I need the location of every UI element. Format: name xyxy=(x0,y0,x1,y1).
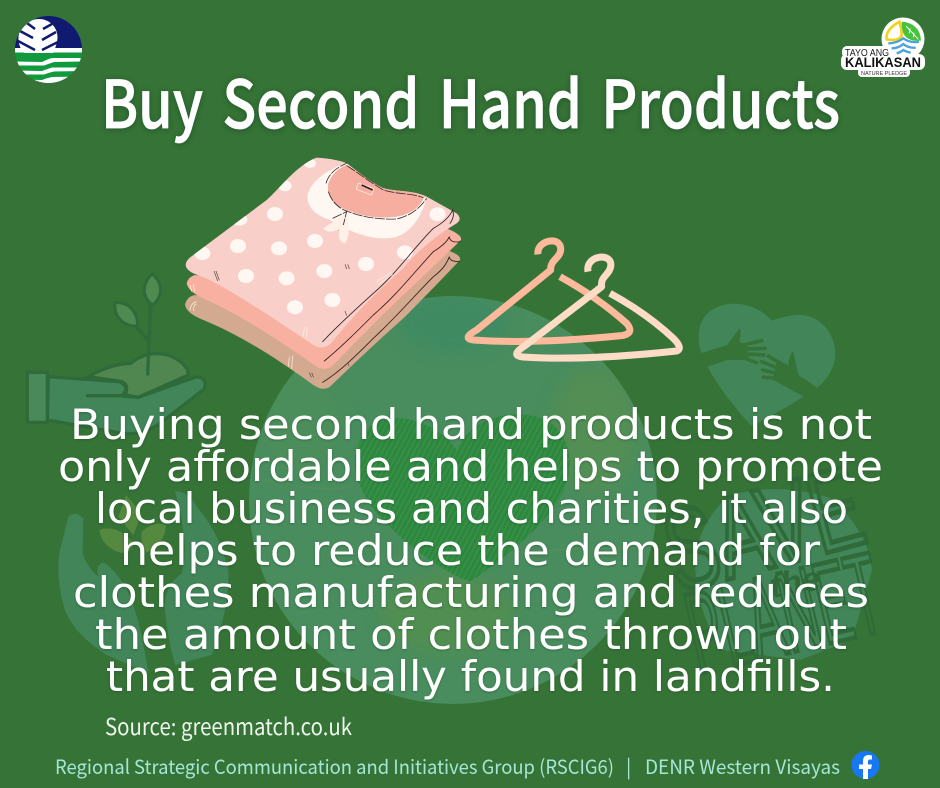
green splash behind lettering xyxy=(695,489,872,660)
collar bow xyxy=(323,213,349,243)
stitch ticks xyxy=(190,272,393,369)
source line: Source: greenmatch.co.uk xyxy=(105,708,352,742)
body text block: the amount of clothes thrown out xyxy=(95,610,847,659)
open hand xyxy=(47,377,205,434)
body text block: Buying second hand products is not xyxy=(70,400,872,449)
body text block: that are usually found in landfills. xyxy=(106,652,835,701)
body text block: clothes manufacturing and reduces xyxy=(73,568,869,617)
folded clothes stack xyxy=(185,158,461,389)
middle shirt xyxy=(187,228,461,369)
hangers xyxy=(468,241,679,358)
top shirt xyxy=(186,158,460,347)
icon: hand holding seedling xyxy=(27,274,205,434)
logo: DENR emblem xyxy=(15,16,82,85)
soil mound xyxy=(88,354,188,397)
watercolor earth globe xyxy=(249,293,657,704)
icon: cream hanger xyxy=(517,257,679,358)
logo leaves and water xyxy=(886,22,921,53)
logo: Tayo ang Kalikasan nature pledge: KALIKASAN xyxy=(845,55,921,70)
white collar xyxy=(307,163,427,238)
icon: facebook xyxy=(852,751,880,779)
neck opening xyxy=(328,165,424,217)
body text block: helps to reduce the demand for xyxy=(120,526,821,575)
logo: Tayo ang Kalikasan nature pledge xyxy=(841,18,925,77)
save the planet lettering: the xyxy=(767,560,824,606)
save the planet lettering xyxy=(650,442,894,698)
seedling xyxy=(135,305,151,374)
footer credit: | xyxy=(626,751,631,780)
white tree xyxy=(18,19,58,53)
icon: peach hanger xyxy=(468,241,630,341)
bottom shirt xyxy=(185,250,460,389)
footer credit: Regional Strategic Communication and Initiatives Group (RSCIG6) xyxy=(55,751,614,780)
logo: Tayo ang Kalikasan nature pledge: NATURE PLEDGE xyxy=(861,71,907,77)
body text block: only affordable and helps to promote xyxy=(58,442,883,491)
body text block xyxy=(58,400,883,701)
icon: heart with reaching hands xyxy=(698,304,835,426)
fold lines xyxy=(323,210,460,382)
logo wordmark: TAYO ANG xyxy=(845,48,889,59)
icon: two hands cupping leaves xyxy=(58,492,228,673)
footer credit: DENR Western Visayas xyxy=(645,751,840,780)
polka dots xyxy=(194,159,446,314)
body text block: local business and charities, it also xyxy=(95,484,848,533)
hatched heart on globe xyxy=(355,414,570,582)
cuff xyxy=(27,372,47,422)
